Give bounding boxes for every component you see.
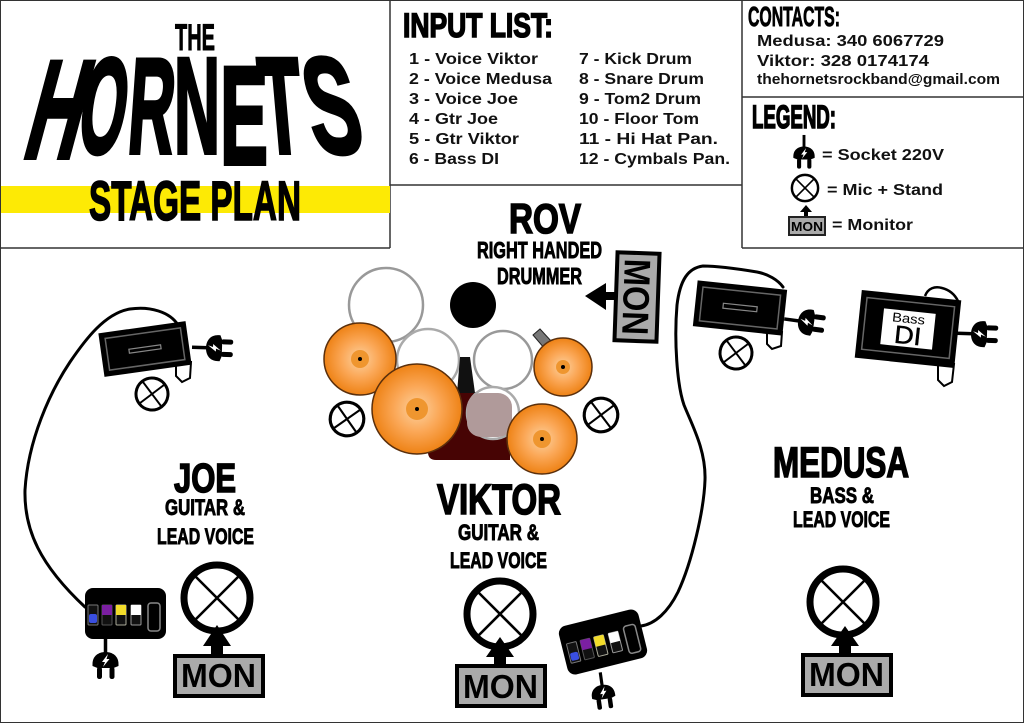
- cymbal four: [507, 404, 577, 474]
- viktor amp: [693, 280, 827, 371]
- list column one: 3 - Voice Joe: [409, 91, 518, 108]
- list column one: 5 - Gtr Viktor: [409, 131, 519, 148]
- panel: legend: [752, 99, 944, 235]
- heading: contacts: CONTACTS:: [748, 1, 840, 32]
- role joe: GUITAR &: [165, 495, 245, 520]
- logo word: hornets: R: [124, 30, 181, 182]
- kick pedal pad: [450, 282, 496, 328]
- viktor pedalboard: [557, 608, 649, 711]
- list column two: 9 - Tom2 Drum: [579, 91, 701, 108]
- monitor box: MON: [614, 258, 658, 336]
- logo word: hornets: [12, 30, 374, 194]
- list column two: [579, 51, 730, 168]
- logo word: hornets: S: [290, 30, 374, 183]
- medusa name and role: LEAD VOICE: [793, 507, 890, 532]
- pedal switches: [566, 624, 641, 668]
- medusa monitor: MON: [809, 656, 884, 693]
- tom right: [474, 331, 532, 389]
- role viktor: GUITAR &: [458, 520, 539, 545]
- bass drum: [428, 392, 510, 460]
- cymbal three: [534, 338, 592, 396]
- logo word: hornets: H: [12, 32, 108, 188]
- snare: [467, 387, 519, 439]
- legend icon: mic: [792, 175, 818, 201]
- drum mic left: [328, 400, 366, 438]
- legend icon: monitor: MON: [791, 219, 823, 234]
- pedal plug: [92, 638, 118, 679]
- amp plug: [192, 334, 233, 362]
- medusa name and role: [773, 439, 909, 532]
- drum mic right: [582, 396, 620, 434]
- drummer name: ROV: [509, 195, 581, 242]
- medusa mic and monitor: [803, 569, 891, 695]
- role medusa: BASS &: [810, 483, 874, 508]
- joe amp: [98, 321, 233, 412]
- name medusa: MEDUSA: [773, 439, 909, 487]
- drum kit: [324, 268, 620, 474]
- pedal switches: [88, 603, 160, 631]
- amp plug: [957, 320, 998, 348]
- drum stool: [467, 393, 512, 437]
- logo word: hornets: E: [220, 37, 268, 194]
- panel: input list: [403, 7, 730, 168]
- amp handle: [925, 287, 958, 301]
- drummer label: [477, 195, 602, 289]
- yellow band: [1, 186, 390, 213]
- medusa mic: [810, 569, 876, 635]
- tom large: [349, 268, 423, 342]
- contact phone: medusa: Medusa: 340 6067729: [757, 33, 944, 50]
- contact email: thehornetsrockband@gmail.com: [757, 72, 1000, 88]
- drum monitor with arrow: [585, 252, 660, 342]
- name viktor: VIKTOR: [437, 476, 561, 524]
- amp foot: [176, 362, 191, 382]
- joe monitor arrow: [203, 625, 231, 656]
- amp body: [693, 280, 787, 336]
- amp plug: [782, 306, 827, 338]
- heading: input list: INPUT LIST:: [403, 7, 553, 45]
- joe name and role: LEAD VOICE: [157, 524, 254, 549]
- viktor mic and monitor: [457, 581, 545, 706]
- legend label: monitor: = Monitor: [832, 217, 913, 234]
- title panel: band logo and stage plan: [1, 17, 390, 232]
- heading: legend: LEGEND:: [752, 99, 836, 135]
- amp foot: [938, 364, 954, 386]
- joe mic: [184, 565, 250, 631]
- amp mic: [718, 335, 754, 371]
- medusa monitor arrow: [831, 626, 859, 655]
- list column two: 10 - Floor Tom: [579, 111, 699, 128]
- viktor name and role: [437, 476, 561, 573]
- list column one: 1 - Voice Viktor: [409, 51, 538, 68]
- legend label: socket: = Socket 220V: [822, 147, 944, 164]
- list column one: [409, 51, 552, 168]
- amp mic: [134, 376, 170, 412]
- bass amp di: [855, 287, 998, 386]
- list column two: 12 - Cymbals Pan.: [579, 151, 730, 168]
- amp foot: [767, 332, 782, 349]
- pedal body: [557, 608, 649, 676]
- joe cable: [25, 308, 178, 607]
- tom left: [397, 329, 459, 391]
- viktor monitor: MON: [463, 668, 538, 705]
- amp body: [855, 290, 961, 368]
- legend icon: socket: [793, 135, 815, 169]
- joe mic and monitor: [175, 565, 263, 696]
- viktor monitor arrow: [486, 637, 514, 666]
- name joe: JOE: [174, 455, 236, 501]
- drummer label: DRUMMER: [497, 263, 582, 289]
- logo word: the: THE: [175, 17, 215, 58]
- viktor mic: [467, 581, 533, 647]
- list column one: 6 - Bass DI: [409, 151, 499, 168]
- list column one: 4 - Gtr Joe: [409, 111, 498, 128]
- logo word: hornets: T: [253, 30, 309, 183]
- cymbal one: [324, 323, 396, 395]
- list column two: 7 - Kick Drum: [579, 51, 692, 68]
- di label: DI: [893, 321, 923, 351]
- viktor name and role: LEAD VOICE: [450, 548, 547, 573]
- legend label: mic: = Mic + Stand: [827, 182, 943, 199]
- contact phone: viktor: Viktor: 328 0174174: [757, 53, 929, 70]
- pedal plug: [589, 671, 617, 711]
- viktor cable: [641, 266, 783, 626]
- drummer role: RIGHT HANDED: [477, 237, 602, 263]
- list column two: 8 - Snare Drum: [579, 71, 704, 88]
- joe pedalboard: [85, 588, 166, 679]
- cymbal two: [372, 364, 462, 454]
- logo word: hornets: O: [71, 30, 138, 182]
- list column one: 2 - Voice Medusa: [409, 71, 552, 88]
- arrow left: [585, 283, 616, 310]
- logo word: hornets: N: [174, 30, 220, 183]
- amp body: [98, 321, 192, 377]
- di label: Bass: [891, 309, 926, 328]
- hi hat stand: [457, 357, 475, 393]
- panel: contacts: [748, 1, 1000, 88]
- joe name and role: [157, 455, 254, 549]
- di label: [880, 308, 936, 353]
- legend icon: monitor: [789, 205, 825, 235]
- cymbal stand: [533, 329, 552, 349]
- subtitle: stage plan: STAGE PLAN: [89, 169, 301, 232]
- pedal body: [85, 588, 166, 639]
- list column two: 11 - Hi Hat Pan.: [579, 131, 718, 148]
- joe monitor: MON: [181, 657, 256, 694]
